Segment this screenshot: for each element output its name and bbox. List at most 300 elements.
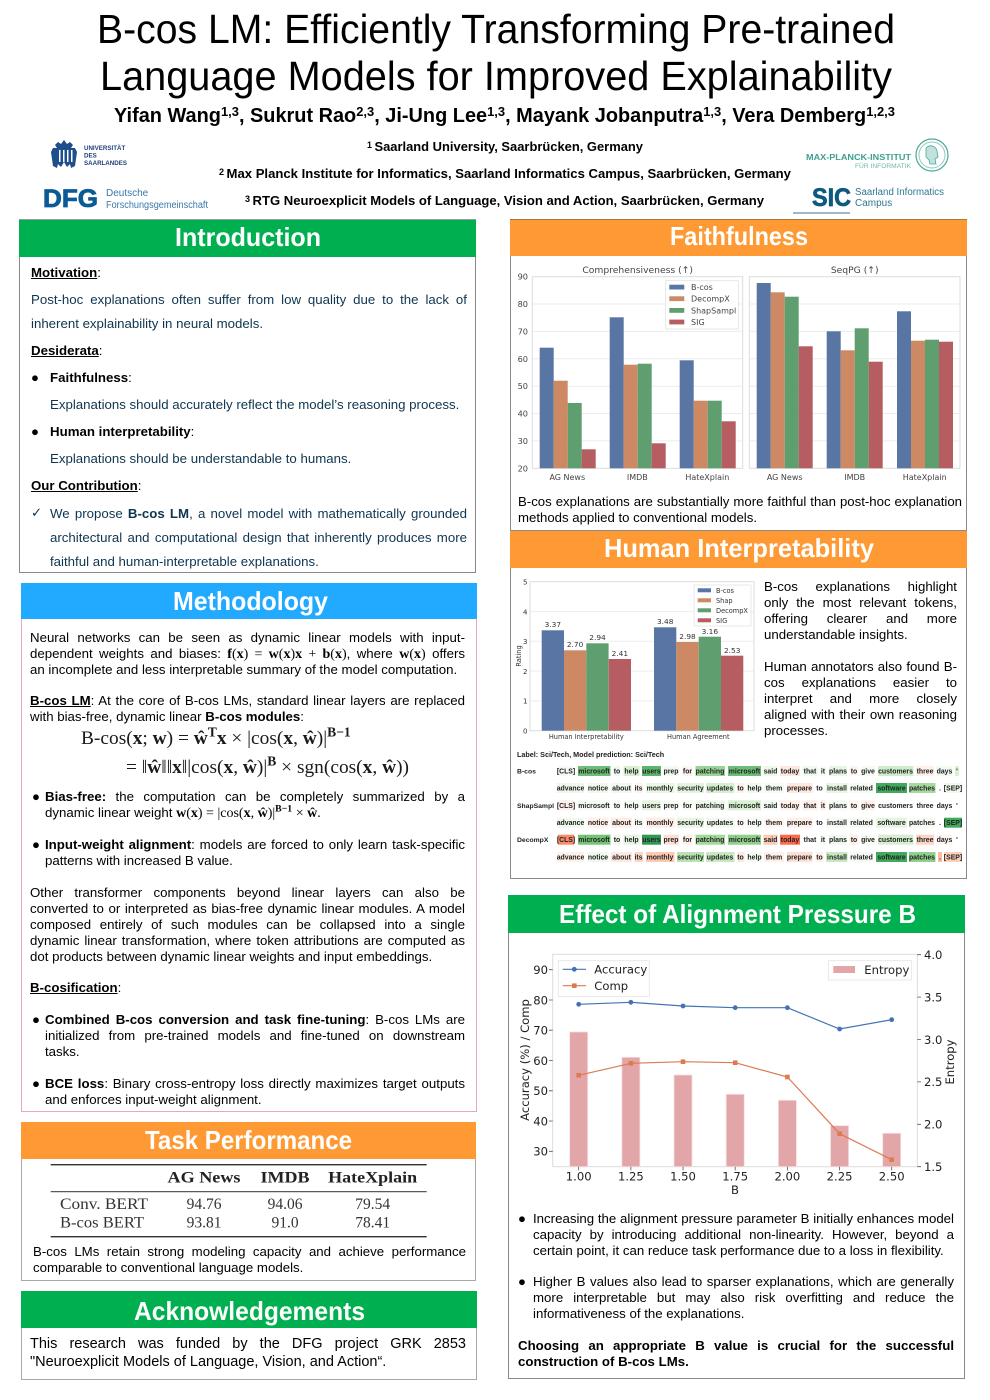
left axis labels: 70	[533, 1024, 548, 1038]
logo: DFG: Forschungsgemeinschaft	[106, 200, 208, 211]
row: B-cos line 2: help	[747, 786, 762, 792]
formula: B-cos definition: = ‖ŵ‖‖x‖|cos(x, ŵ)|B × sgn(cos(x, ŵ))	[126, 754, 409, 778]
legend: accuracy and comp: Comp	[594, 979, 628, 993]
bullet: conversion and fine-tuning: tasks.	[45, 1044, 80, 1059]
text: B-cos LM paragraph: B-cos LM: At the core of B-cos LMs, standard linear layers are replaced	[30, 693, 465, 708]
bullet: sparser explanations	[518, 1274, 954, 1321]
category labels: AG News	[549, 473, 585, 482]
legend: SIG	[716, 617, 727, 625]
table: accuracy results: AG News	[168, 1170, 240, 1186]
bullet: alignment pressure effect: ●	[518, 1211, 526, 1226]
row: B-cos line 2: notice	[588, 786, 608, 792]
row: ShapSampl line 1: for	[683, 803, 692, 810]
logo: Universität des Saarlandes: UNIVERSITÄT	[84, 145, 125, 152]
authors: 1,3	[703, 104, 721, 119]
bullet: BCE loss	[32, 1076, 465, 1107]
text: conclusion: Choosing an appropriate B value is crucial for the successful	[518, 1338, 954, 1353]
row: DecompX line 2: monthly	[647, 854, 674, 862]
row: B-cos line 1: [CLS]	[557, 768, 575, 776]
authors	[114, 104, 895, 127]
row: DecompX line 2: install	[827, 854, 847, 862]
text: other transformer components	[30, 885, 465, 964]
text: interpretability findings: only the most relevant tokens,	[764, 595, 957, 610]
chart: accuracy, comp and entropy	[518, 948, 957, 1197]
text: other transformer components: converted to or interpreted as bias-free dynamic linear modules. A model	[30, 901, 465, 916]
panel: methodology	[21, 583, 477, 1112]
row: ShapSampl line 2: monthly	[647, 820, 674, 827]
row: ShapSampl line 2: related	[850, 820, 873, 827]
row: DecompX line 1: users	[642, 837, 661, 844]
row: B-cos line 1: days	[937, 768, 953, 776]
authors: , Vera Demberg	[721, 105, 866, 127]
row: DecompX line 2: its	[634, 854, 643, 862]
row labels	[517, 768, 554, 844]
text: faithfulness summary: methods applied to conventional models.	[518, 510, 757, 525]
row: B-cos line 1: patching	[696, 768, 724, 776]
bullet: faithfulness: ● Faithfulness:	[31, 370, 132, 385]
text: other transformer components: composed entirely of such modules can be collapsed into a single	[30, 917, 465, 932]
logo: Max Planck Institut	[806, 138, 949, 172]
bullet: BCE loss: and enforces input-weight alignment.	[45, 1092, 262, 1107]
affiliations: 3	[245, 194, 253, 204]
row: ShapSampl line 1: plans	[829, 803, 847, 810]
row: B-cos line 1: said	[764, 768, 777, 776]
text: other transformer components: dynamic linear transformation, where token attributions are computed as	[30, 933, 465, 948]
row: B-cos line 1: '	[956, 768, 958, 776]
text: B-cosification: B-cosification:	[30, 980, 121, 995]
legend: SIG	[691, 318, 705, 327]
text: intro paragraph: an incomplete and less interpretable summary of the model computation.	[30, 662, 457, 677]
row: B-cos line 2: [SEP]	[944, 786, 962, 792]
row: ShapSampl line 1: it	[821, 803, 826, 810]
row: DecompX line 2: help	[747, 854, 762, 862]
formula: B-cos definition: B-cos(x; w) = ŵTx × |cos(x, ŵ)|B−1	[81, 725, 351, 749]
axes: 2	[523, 668, 528, 676]
logo: SIC: Campus	[855, 198, 892, 209]
row: B-cos line 1: that	[804, 768, 817, 776]
affiliations: Max Planck Institute for Informatics, Saarland Informatics Campus, Saarbrücken, Germany	[227, 166, 792, 181]
logo: Universität des Saarlandes: DES	[84, 152, 97, 160]
logo: DFG	[43, 185, 208, 213]
x axis labels: Entropy	[943, 1039, 957, 1085]
text: motivation body: Post-hoc explanations often suffer from low quality due to the lack of	[31, 292, 467, 307]
text: conclusion: construction of B-cos LMs.	[518, 1354, 689, 1369]
row: ShapSampl line 2: help	[747, 820, 762, 827]
row: ShapSampl line 1: give	[861, 803, 875, 810]
row: ShapSampl line 2: notice	[588, 820, 608, 827]
x axis labels: 1.50	[670, 1170, 696, 1184]
value labels: 2.53	[724, 646, 741, 655]
row: DecompX line 1	[557, 835, 958, 845]
row: ShapSampl line 1: users	[642, 803, 661, 810]
text: interpretability findings: aligned with their own reasoning	[764, 707, 957, 722]
text: interpretability findings	[764, 579, 957, 738]
x axis labels	[518, 999, 957, 1197]
row labels: ShapSampl	[517, 803, 554, 810]
category labels: HateXplain	[903, 473, 947, 482]
text: contribution line 2: architectural and computational design that inherently produces more	[50, 530, 467, 545]
authors: , Sukrut Rao	[239, 105, 356, 127]
text: interpretability findings: cos explanations easier to	[764, 675, 957, 690]
bullet: sparser explanations: ●	[518, 1274, 526, 1289]
legend: Shap	[716, 597, 733, 605]
row: DecompX line 1: customers	[878, 837, 913, 844]
row: ShapSampl line 1: help	[624, 803, 639, 810]
legend: B-cos	[691, 283, 713, 292]
row: DecompX line 2: updates	[707, 854, 733, 862]
row: B-cos line 1: three	[917, 768, 934, 776]
x axis labels: 2.00	[774, 1170, 800, 1184]
right axis labels: 2.0	[924, 1118, 942, 1132]
axis labels: 30	[518, 436, 528, 446]
bullet: input-weight alignment: patterns with increased B value.	[45, 853, 233, 868]
title	[97, 6, 895, 99]
axis labels: 70	[518, 326, 528, 336]
row: DecompX line 1: help	[624, 837, 639, 844]
legend: ShapSampl	[691, 306, 736, 315]
x axis labels: 1.75	[722, 1170, 748, 1184]
value labels: 2.98	[679, 632, 696, 641]
row labels: B-cos	[517, 768, 536, 776]
chart: human ratings bars: Human Agreement	[667, 733, 730, 741]
value labels: 3.37	[545, 620, 561, 629]
authors: , Ji-Ung Lee	[374, 105, 487, 127]
left axis labels: 80	[533, 993, 548, 1007]
row: ShapSampl line 1: microsoft	[578, 803, 610, 810]
panel: task performance	[21, 1122, 476, 1281]
logo: Max Planck Institut: MAX-PLANCK-INSTITUT	[806, 152, 912, 162]
text: task performance summary: B-cos LMs retain strong modeling capacity and achieve performance	[33, 1244, 466, 1259]
row: DecompX line 1: for	[683, 837, 692, 844]
text: desiderata: :	[99, 343, 102, 358]
authors: 1,3	[487, 104, 505, 119]
panel: faithfulness	[510, 219, 967, 531]
row labels: DecompX	[517, 837, 549, 844]
row: ShapSampl line 2: .	[939, 820, 941, 827]
row: DecompX line 1: '	[956, 837, 958, 844]
table: accuracy results	[50, 1164, 427, 1238]
logo: DFG: DFG	[43, 185, 98, 213]
row: ShapSampl line 1: microsoft	[729, 803, 761, 810]
row: B-cos line 1: prep	[664, 768, 678, 776]
category labels: AG News	[767, 473, 803, 482]
row: B-cos line 1: customers	[878, 768, 913, 776]
row: B-cos line 2: patches	[909, 786, 935, 792]
row: B-cos line 1: give	[861, 768, 875, 776]
category labels: HateXplain	[685, 473, 729, 482]
row: ShapSampl line 1: [CLS]	[557, 803, 575, 810]
logo: SIC: SIC	[812, 184, 851, 212]
bars: B-cos	[540, 283, 911, 468]
row: ShapSampl line 2: security	[677, 820, 704, 827]
x axis labels: 1.25	[618, 1170, 644, 1184]
text: task performance summary	[33, 1244, 466, 1275]
heading: Introduction	[19, 220, 476, 257]
bullet: conversion and fine-tuning: initialized from pre-trained models and fine-tuned on downstream	[45, 1028, 465, 1043]
affiliations: RTG Neuroexplicit Models of Language, Vision and Action, Saarbrücken, Germany	[253, 193, 765, 208]
legend: B-cos	[716, 587, 735, 595]
row: DecompX line 1: three	[917, 837, 934, 844]
row: B-cos line 1: microsoft	[729, 768, 761, 776]
row: B-cos line 2: install	[827, 786, 847, 792]
row: ShapSampl line 1: to	[614, 803, 620, 810]
row: B-cos line 1: today	[781, 768, 799, 776]
bars: human interpretability	[542, 630, 631, 731]
text: task performance summary: comparable to conventional language models.	[33, 1260, 303, 1275]
row: DecompX line 1: today	[781, 837, 799, 844]
table: accuracy results: B-cos BERT	[60, 1215, 145, 1232]
line: accuracy	[576, 1000, 894, 1031]
logo: Universität des Saarlandes	[51, 140, 127, 168]
table: accuracy results: HateXplain	[328, 1170, 418, 1186]
row: DecompX line 1: patching	[696, 837, 724, 844]
panel: acknowledgements	[21, 1291, 477, 1380]
bullet: BCE loss: BCE loss: Binary cross-entropy loss directly maximizes target outputs	[45, 1076, 465, 1091]
category labels: Comprehensiveness (↑)	[582, 265, 693, 276]
panel: introduction	[19, 220, 476, 573]
authors: Yifan Wang	[114, 105, 221, 127]
row: B-cos line 1: microsoft	[578, 768, 610, 776]
row: DecompX line 1: that	[804, 837, 817, 844]
value labels: 3.48	[657, 617, 674, 626]
bullet: alignment pressure effect: certain point, it can reduce task performance due to a loss in flexibility.	[533, 1243, 944, 1258]
row: ShapSampl line 1: that	[804, 803, 817, 810]
row: ShapSampl line 1: said	[764, 803, 777, 810]
row: DecompX line 2: related	[850, 854, 873, 862]
text: faithfulness description: Explanations should accurately reflect the model’s reasoning process.	[50, 397, 459, 412]
text: intro paragraph: Neural networks can be seen as dynamic linear models with input-	[30, 630, 465, 645]
row: DecompX line 1: [CLS]	[557, 837, 575, 844]
axes: 4	[523, 608, 528, 616]
row: DecompX line 2: them	[766, 854, 782, 862]
row: DecompX line 1: days	[937, 837, 953, 844]
x axis labels: 2.50	[879, 1170, 905, 1184]
axes: 1	[523, 698, 528, 706]
logo: SIC	[793, 184, 944, 214]
value labels	[545, 617, 741, 658]
value labels: 2.70	[567, 640, 584, 649]
text: motivation body 2: inherent explainability in neural models.	[31, 316, 263, 331]
text: contribution line 3: faithful and human-interpretable explanations.	[50, 554, 319, 569]
row: DecompX line 2: prepare	[787, 854, 812, 862]
affiliations: 2	[219, 167, 227, 177]
text: faithfulness summary: B-cos explanations are substantially more faithful than post-hoc explanation	[518, 494, 962, 509]
row: B-cos line 2: prepare	[787, 786, 812, 792]
value labels: 2.94	[589, 633, 606, 642]
heading: Acknowledgements	[21, 1291, 477, 1328]
row: B-cos line 1	[557, 766, 959, 776]
row: ShapSampl line 1: days	[937, 803, 953, 810]
row: ShapSampl line 2: to	[737, 820, 744, 827]
text: interpretability findings: Human annotators also found B-	[764, 659, 957, 674]
row: B-cos line 1: it	[821, 768, 826, 776]
heading: Task Performance: Task Performance	[145, 1125, 352, 1155]
bullet: alignment pressure effect: Increasing the alignment pressure parameter B initially enhances model	[533, 1211, 954, 1226]
bullet: bias-free: Bias-free: the computation can be completely summarized by a	[45, 789, 465, 804]
affiliations	[219, 139, 792, 208]
line: comp	[576, 1059, 894, 1162]
chart: human ratings bars: Rating	[515, 645, 523, 667]
row: DecompX line 1: to	[614, 837, 620, 844]
text: contribution line 1: We propose B-cos LM, a novel model with mathematically grounded	[50, 506, 467, 521]
row: B-cos line 2: software	[877, 786, 906, 792]
text: interpretability findings: interpret and more closely	[764, 691, 957, 706]
heading: Acknowledgements: Acknowledgements	[134, 1296, 365, 1326]
axis labels: 60	[518, 354, 528, 364]
bullet: bias-free: ●	[32, 789, 40, 804]
table: accuracy results: Conv. BERT	[60, 1196, 149, 1213]
x axis labels: Accuracy (%) / Comp	[518, 999, 532, 1121]
bullet: sparser explanations: informativeness of the explanations.	[533, 1306, 744, 1321]
legend: DecompX	[691, 295, 730, 304]
row: ShapSampl line 1: '	[956, 803, 958, 810]
text: conclusion	[518, 1338, 954, 1369]
bullet: alignment pressure effect: capacity by introducing additional non-linearity. However, beyond a	[533, 1227, 954, 1242]
bars: entropy	[570, 1032, 901, 1167]
row: ShapSampl line 2: to	[816, 820, 823, 827]
row: DecompX line 1: microsoft	[578, 837, 610, 844]
authors: , Mayank Jobanputra	[505, 105, 704, 127]
left axis labels: 40	[533, 1114, 548, 1128]
text: B-cos LM paragraph: with bias-free, dynamic linear B-cos modules:	[30, 709, 304, 724]
row: ShapSampl line 2: prepare	[787, 820, 812, 827]
bullet: input-weight alignment: ●	[32, 837, 40, 852]
axis labels: 40	[518, 408, 528, 418]
axes	[523, 578, 528, 736]
bullet: conversion and fine-tuning: Combined B-cos conversion and task fine-tuning: B-cos LMs are	[45, 1012, 465, 1027]
row: ShapSampl line 2: about	[612, 820, 632, 827]
x axis labels: B	[731, 1183, 739, 1197]
row: DecompX line 2	[557, 852, 962, 862]
row: ShapSampl line 2: advance	[557, 820, 584, 827]
row: DecompX line 2: security	[677, 854, 704, 862]
row: ShapSampl line 1: patching	[696, 803, 724, 810]
row: B-cos line 1: help	[624, 768, 639, 776]
text: interpretability findings: B-cos explanations highlight	[764, 579, 957, 594]
text: interpretability findings: understandable insights.	[764, 627, 908, 642]
legend: accuracy and comp	[558, 961, 649, 997]
legend	[666, 281, 738, 329]
row: B-cos line 2: them	[766, 786, 782, 792]
row: ShapSampl line 1: to	[851, 803, 857, 810]
right axis labels	[924, 948, 942, 1174]
table: accuracy results: IMDB	[260, 1170, 310, 1186]
table: accuracy results: 79.54	[355, 1196, 390, 1213]
row: B-cos line 1: to	[851, 768, 857, 776]
axis labels: 80	[518, 299, 528, 309]
row: B-cos line 1: for	[683, 768, 692, 776]
row: DecompX line 1: give	[861, 837, 875, 844]
table: accuracy results: 94.76	[187, 1196, 222, 1213]
affiliations: 1	[367, 140, 374, 150]
row: DecompX line 2: to	[737, 854, 744, 862]
text: motivation: Motivation	[31, 265, 97, 280]
bullet: human interpretability: ● Human interpretability:	[31, 424, 194, 439]
value labels: 2.41	[612, 649, 628, 658]
bullet: alignment pressure effect	[518, 1211, 954, 1258]
bullet: sparser explanations: more interpretable but may also risk overfitting and reduce the	[533, 1290, 954, 1305]
row: ShapSampl line 1: customers	[878, 803, 913, 810]
row: DecompX line 1: prep	[664, 837, 678, 844]
table: accuracy results: 94.06	[268, 1196, 303, 1213]
text: interpretability findings: offering clearer and more	[764, 611, 957, 626]
logo: Max Planck Institut: FÜR INFORMATIK	[855, 162, 912, 170]
legend: accuracy and comp: Accuracy	[594, 963, 647, 977]
panel: human interpretability	[510, 531, 967, 879]
row: ShapSampl line 2: patches	[909, 820, 935, 827]
value labels: 3.16	[702, 627, 718, 636]
text: our contribution: :	[138, 478, 141, 493]
category labels	[549, 265, 947, 482]
right axis labels: 4.0	[924, 948, 942, 962]
heatmap: token attributions	[517, 750, 962, 862]
text: motivation: :	[97, 265, 101, 280]
right axis labels: 3.5	[924, 990, 942, 1004]
right axis labels: 3.0	[924, 1033, 942, 1047]
legend: entropy: Entropy	[864, 963, 909, 977]
heading: Introduction: Introduction	[175, 222, 321, 252]
title: Language Models for Improved Explainability	[100, 53, 892, 99]
row: DecompX line 1: plans	[829, 837, 847, 844]
logo: DFG: Deutsche	[106, 188, 149, 199]
row: B-cos line 2: about	[612, 786, 632, 792]
logo: SIC: Saarland Informatics	[855, 187, 944, 198]
heading: Effect of Alignment Pressure B: Effect of Alignment Pressure B	[559, 899, 916, 929]
bars: SIG	[582, 342, 953, 468]
row: DecompX line 2: advance	[557, 854, 584, 862]
left axis labels: 50	[533, 1084, 548, 1098]
axes: 3	[523, 638, 528, 646]
bullet: bias-free: dynamic linear weight w(x) = |cos(x, ŵ)|B−1 × ŵ.	[45, 803, 321, 821]
row: ShapSampl line 2: its	[634, 820, 643, 827]
text: B-cos LM paragraph	[30, 693, 465, 724]
x axis labels: 1.00	[566, 1170, 592, 1184]
authors: 1,3	[221, 104, 239, 119]
row: DecompX line 2: about	[612, 854, 632, 862]
text: other transformer components: Other transformer components beyond linear layers can also be	[30, 885, 465, 900]
category labels: IMDB	[844, 473, 865, 482]
text: faithfulness summary	[518, 494, 962, 525]
bars: ShapSampl	[568, 297, 939, 468]
row: B-cos line 2: to	[737, 786, 744, 792]
text: funding: This research was funded by the DFG project GRK 2853	[30, 1336, 466, 1352]
row: B-cos line 2: updates	[707, 786, 733, 792]
formula: B-cos definition	[81, 725, 409, 778]
left axis labels	[533, 963, 548, 1159]
row: B-cos line 2: advance	[557, 786, 584, 792]
table: accuracy results: 93.81	[187, 1215, 221, 1232]
label line: Label: Sci/Tech, Model prediction: Sci/Tech	[517, 750, 664, 759]
heading: Methodology	[21, 583, 477, 619]
authors: 2,3	[356, 104, 374, 119]
row: ShapSampl line 2: updates	[707, 820, 733, 827]
heading: Faithfulness: Faithfulness	[670, 221, 808, 251]
text: our contribution: Our Contribution	[31, 478, 138, 493]
affiliations: Saarland University, Saarbrücken, Germany	[374, 139, 644, 154]
bullet: input-weight alignment: Input-weight alignment: models are forced to only learn task-specific	[45, 837, 465, 852]
logo: Universität des Saarlandes: SAARLANDES	[84, 160, 127, 167]
row: ShapSampl line 1: today	[781, 803, 799, 810]
chart: comprehensiveness and SeqPG bars	[518, 265, 960, 482]
text: funding: "Neuroexplicit Models of Language, Vision, and Action“.	[30, 1354, 386, 1370]
row: B-cos line 1: to	[614, 768, 620, 776]
bullet: sparser explanations: Higher B values also lead to sparser explanations, which are generally	[533, 1274, 954, 1289]
legend: entropy	[828, 961, 912, 980]
row: DecompX line 2: notice	[588, 854, 608, 862]
category labels: SeqPG (↑)	[831, 265, 879, 276]
heading: Faithfulness	[510, 219, 967, 256]
axes: 0	[523, 728, 528, 736]
